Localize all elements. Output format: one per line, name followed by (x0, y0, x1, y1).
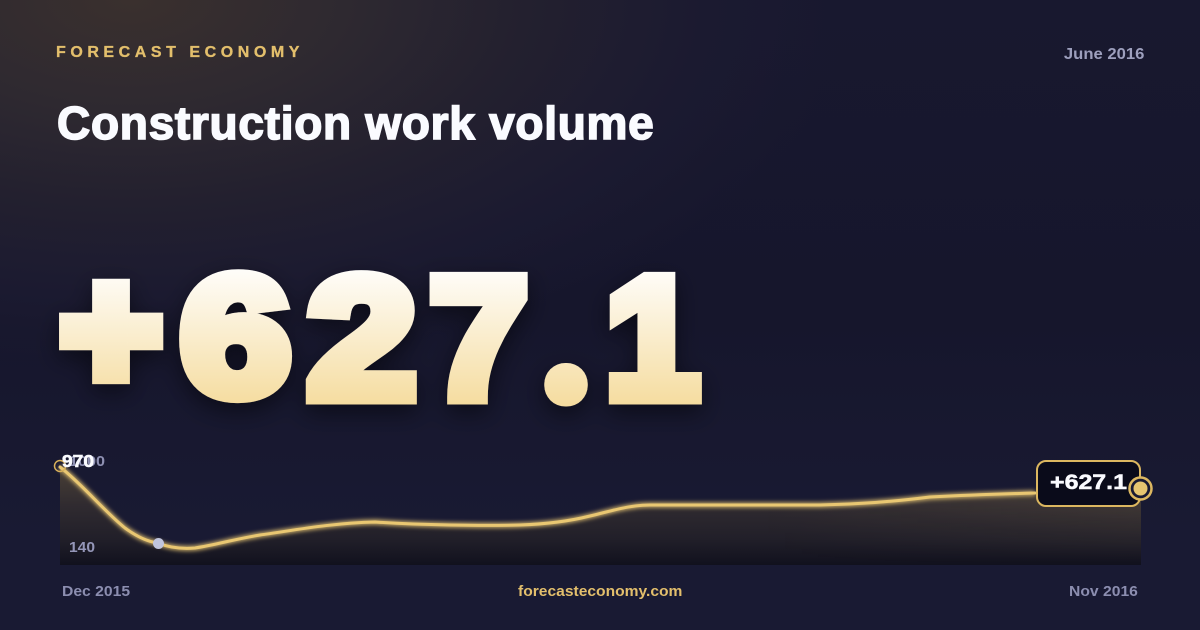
start value label: 970 (62, 451, 94, 471)
axis max label: 1000 (69, 453, 105, 470)
hero number: 6 (181, 242, 290, 430)
end marker (1130, 478, 1152, 500)
hero number: + (61, 235, 161, 425)
title: Construction work volume (57, 97, 654, 149)
hero number: 1 (606, 243, 699, 434)
start marker (54, 460, 66, 472)
area chart (54, 451, 1152, 565)
value callout (1037, 461, 1140, 506)
trend line (60, 467, 1035, 548)
hero number: . (565, 378, 568, 389)
hero number: 7 (430, 243, 528, 434)
line glow (60, 467, 1035, 548)
brand label: FORECAST ECONOMY (56, 44, 304, 61)
hero number: 2 (308, 243, 416, 434)
date label: June 2016 (1064, 46, 1144, 63)
source website: forecasteconomy.com (518, 583, 682, 600)
right area tint (966, 494, 1141, 532)
start date label: Dec 2015 (62, 583, 130, 600)
chart area fill (60, 467, 1141, 565)
low point marker (153, 538, 164, 549)
hero number (61, 235, 699, 434)
end date label: Nov 2016 (1069, 583, 1138, 600)
axis min label: 140 (69, 539, 95, 556)
value callout: +627.1 (1050, 471, 1127, 494)
